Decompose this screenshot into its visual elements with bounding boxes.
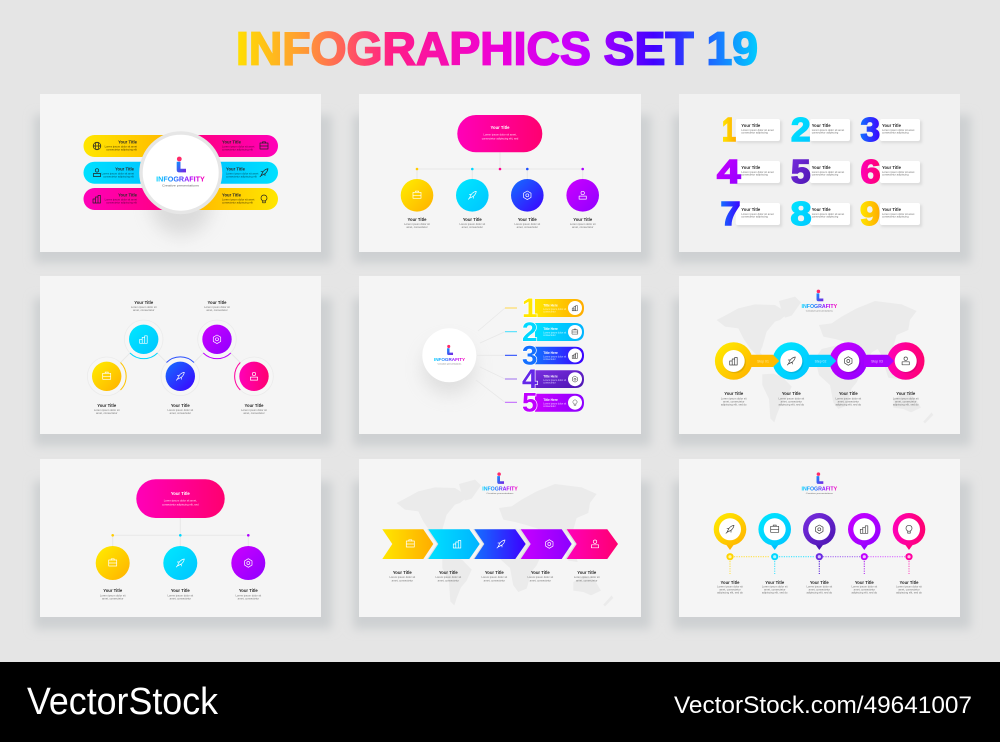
logo: INFOGRAFITY	[482, 487, 518, 493]
card texts: consectetur adipiscing	[741, 172, 768, 176]
bar texts: Lorem ipsum dolor sit	[543, 332, 566, 334]
captions: Lorem ipsum dolor sit	[204, 305, 230, 309]
pill texts left: Your Title	[118, 192, 138, 198]
pill texts right: consectetur adipiscing elit	[222, 200, 253, 204]
number 7: 7	[720, 195, 740, 232]
card texts: Lorem ipsum dolor sit amet	[882, 212, 915, 216]
captions: Your Title	[839, 391, 858, 396]
captions	[404, 217, 596, 229]
bar 2: 2	[522, 317, 538, 347]
card texts: Your Title	[741, 165, 761, 170]
captions: amet, consectetur	[133, 308, 154, 312]
card texts: Lorem ipsum dolor sit amet	[812, 170, 844, 174]
bar texts: Title Here	[543, 351, 558, 355]
top pill text: consectetur adipiscing elit, sed	[162, 502, 199, 506]
card texts: Lorem ipsum dolor sit amet	[882, 170, 915, 174]
pin 2	[758, 513, 791, 560]
captions: Your Title	[245, 403, 264, 408]
bar texts	[543, 304, 566, 408]
captions: adipiscing elit, sed do	[896, 591, 922, 595]
card texts: Lorem ipsum dolor sit amet	[882, 128, 915, 132]
card texts: Your Title	[882, 123, 902, 128]
card texts: consectetur adipiscing	[741, 130, 768, 134]
pill texts right: Lorem ipsum dolor sit amet	[226, 172, 259, 176]
bar texts: consectetur	[543, 358, 556, 361]
bar texts: Title Here	[543, 304, 558, 308]
captions: amet, consectetur	[895, 400, 916, 404]
circle 1	[401, 179, 433, 212]
captions: amet, consectetur	[838, 400, 859, 404]
connector colour ends	[505, 308, 517, 402]
captions: amet, consectetur	[96, 411, 117, 415]
pill texts left: Lorem ipsum dolor sit amet	[102, 172, 134, 176]
captions: Your Title	[171, 403, 190, 408]
number 8: 8	[790, 195, 812, 232]
circle 4	[566, 179, 599, 212]
top pill text: Lorem ipsum dolor sit amet,	[164, 498, 197, 502]
logo	[802, 290, 838, 312]
ring circle yellow	[87, 357, 126, 396]
captions: adipiscing elit, sed do	[893, 402, 919, 406]
card texts: Lorem ipsum dolor sit amet	[741, 170, 774, 174]
bar 4	[522, 364, 584, 394]
captions: Lorem ipsum dolor sit	[778, 396, 804, 400]
step arrows: Step 01	[757, 359, 769, 363]
footer bar	[0, 662, 1000, 742]
card texts: consectetur adipiscing	[882, 130, 909, 134]
bar texts: Lorem ipsum dolor sit	[543, 402, 566, 406]
left pill: magenta	[84, 188, 194, 210]
captions: Lorem ipsum dolor sit	[481, 575, 507, 579]
bar 1: 1	[522, 293, 538, 323]
card texts: Your Title	[741, 207, 761, 212]
top pill text: Lorem ipsum dolor sit amet,	[483, 132, 517, 136]
pill texts right: Your Title	[226, 166, 246, 172]
world map	[397, 480, 613, 606]
card texts: Lorem ipsum dolor sit amet	[741, 212, 774, 216]
captions: Lorem ipsum dolor sit	[100, 593, 126, 597]
logo: INFOGRAFITY	[156, 177, 205, 184]
panel: zigzag five circles	[40, 276, 321, 434]
captions: Your Title	[531, 570, 550, 575]
chevron shadows	[427, 529, 580, 559]
captions: amet, consectetur	[392, 578, 413, 582]
captions: Your Title	[900, 580, 919, 585]
number 2: 2	[791, 111, 810, 148]
captions: Lorem ipsum dolor sit	[435, 575, 461, 579]
number 5: 5	[791, 153, 810, 190]
captions: Lorem ipsum dolor sit	[574, 575, 600, 579]
logo: Creative presentations	[162, 183, 200, 187]
captions: Lorem ipsum dolor sit	[235, 593, 261, 597]
logo: INFOGRAFITY	[802, 304, 838, 310]
captions: Your Title	[97, 403, 117, 408]
captions: Your Title	[855, 580, 874, 585]
world map	[717, 297, 933, 423]
captions: Lorem ipsum dolor sit	[896, 585, 922, 589]
ring circle blue	[161, 357, 200, 396]
logo	[482, 472, 518, 495]
captions: Your Title	[208, 300, 227, 305]
circle 1	[96, 546, 130, 580]
dotted timeline	[730, 557, 909, 574]
bar texts: Title Here	[543, 327, 558, 331]
panel: org chart three circles	[40, 459, 321, 617]
captions: Lorem ipsum dolor sit	[527, 575, 553, 579]
bar texts: consectetur	[543, 382, 556, 384]
captions: amet, consectetur	[576, 578, 597, 582]
captions: amet, consectetur	[102, 596, 123, 600]
ring circle purple	[198, 320, 236, 359]
pill texts right: Your Title	[222, 192, 242, 198]
left pill: yellow	[84, 135, 194, 157]
captions: Lorem ipsum dolor sit	[404, 222, 430, 226]
bar texts: consectetur	[543, 405, 556, 408]
captions: amet, consectetur	[438, 578, 459, 582]
captions	[100, 588, 261, 600]
pill icons	[93, 142, 268, 203]
captions: adipiscing elit, sed do	[721, 402, 747, 406]
captions: Lorem ipsum dolor sit	[806, 585, 832, 589]
captions: amet, consectetur	[854, 588, 875, 592]
captions: Lorem ipsum dolor sit	[570, 222, 596, 226]
circle 2	[456, 179, 489, 212]
number 1: 1	[722, 111, 736, 148]
captions: amet, consectetur	[243, 411, 265, 415]
pill texts left: Your Title	[118, 140, 138, 144]
panel: pin timeline	[679, 459, 960, 617]
footer url: VectorStock.com/49641007	[674, 692, 972, 719]
circle 3	[231, 546, 265, 580]
pill texts right: Lorem ipsum dolor sit amet	[222, 144, 255, 148]
chevron 5	[567, 529, 618, 559]
captions	[717, 580, 922, 595]
captions: amet, consectetur	[781, 400, 802, 404]
chevron 1	[382, 529, 433, 559]
card texts: consectetur adipiscing	[812, 130, 839, 134]
right pill: magenta	[168, 135, 278, 157]
bar texts: Title Here	[543, 374, 558, 378]
footer brand: VectorStock	[27, 681, 219, 723]
pill texts left: Your Title	[115, 166, 135, 172]
captions: amet, consectetur	[406, 225, 428, 229]
top pill text: Your Title	[491, 125, 510, 130]
bar 4: 4	[522, 364, 538, 394]
captions: adipiscing elit, sed do	[806, 591, 833, 595]
pin 5	[893, 513, 925, 560]
pill texts right: consectetur adipiscing elit	[226, 174, 257, 178]
ring circle magenta	[235, 357, 273, 396]
card texts: consectetur adipiscing	[741, 214, 768, 218]
logo: Creative presentations	[806, 309, 833, 312]
pill texts left: Lorem ipsum dolor sit amet	[105, 198, 137, 202]
captions: amet, consectetur	[170, 596, 191, 600]
captions: adipiscing elit, sed do	[717, 591, 743, 595]
captions: adipiscing elit, sed do	[835, 402, 862, 406]
white cards	[736, 119, 920, 225]
top pill text	[162, 491, 199, 506]
pill texts left	[102, 140, 138, 204]
captions: Your Title	[439, 570, 458, 575]
captions: amet, consectetur	[572, 225, 593, 229]
captions: Lorem ipsum dolor sit	[851, 585, 877, 589]
pin 3	[803, 513, 836, 560]
bar texts: Title Here	[543, 398, 558, 402]
captions: Lorem ipsum dolor sit	[893, 396, 919, 400]
number 6: 6	[860, 153, 880, 190]
captions: adipiscing elit, sed do	[762, 591, 788, 595]
bar 5	[522, 388, 584, 418]
captions: Lorem ipsum dolor sit	[459, 222, 485, 226]
captions: Lorem ipsum dolor sit	[241, 408, 267, 412]
captions: Lorem ipsum dolor sit	[94, 408, 120, 412]
pill texts left: consectetur adipiscing elit	[106, 148, 137, 152]
panel: numbered cards one to nine	[679, 94, 960, 252]
card texts: Your Title	[882, 165, 902, 170]
captions: amet, consectetur	[809, 588, 830, 592]
captions: amet, consectetur	[530, 578, 551, 582]
captions: Your Title	[408, 217, 427, 222]
top pill text	[482, 125, 519, 140]
number 4: 4	[717, 153, 741, 190]
captions: amet, consectetur	[517, 225, 538, 229]
donuts	[715, 342, 924, 380]
central circle	[143, 135, 219, 211]
captions: Your Title	[103, 588, 123, 593]
top pill	[136, 479, 225, 518]
right pill: yellow	[168, 188, 278, 210]
pill texts left: Lorem ipsum dolor sit amet	[105, 144, 137, 148]
card texts: Your Title	[812, 207, 831, 212]
captions: adipiscing elit, sed do	[851, 591, 878, 595]
logo	[802, 472, 838, 495]
bar texts: Lorem ipsum dolor sit	[543, 379, 566, 382]
captions: Your Title	[782, 391, 801, 396]
pill texts left: consectetur adipiscing elit	[106, 200, 137, 204]
captions: Lorem ipsum dolor sit	[131, 305, 157, 309]
card texts: Lorem ipsum dolor sit amet	[812, 128, 844, 132]
central circle	[422, 328, 476, 382]
chevron 3	[474, 529, 526, 559]
bar texts: Lorem ipsum dolor sit	[543, 355, 566, 358]
circle 3	[511, 179, 544, 212]
number 3: 3	[860, 111, 880, 148]
bar 1	[522, 293, 584, 323]
captions: Your Title	[171, 588, 190, 593]
captions	[94, 300, 267, 415]
logo: Creative presentations	[806, 492, 833, 495]
captions: amet, consectetur	[170, 411, 191, 415]
captions: Your Title	[577, 570, 597, 575]
panel: world map chevrons	[359, 459, 641, 617]
captions: amet, consectetur	[462, 225, 483, 229]
captions: Lorem ipsum dolor sit	[389, 575, 415, 579]
captions: amet, consectetur	[719, 588, 741, 592]
pin 1	[714, 513, 746, 560]
ring circle cyan	[124, 320, 163, 359]
chevron 2	[428, 529, 480, 559]
pill texts left: consectetur adipiscing elit	[103, 174, 134, 178]
bar texts: consectetur	[543, 334, 556, 337]
captions: Lorem ipsum dolor sit	[514, 222, 540, 226]
captions: amet, consectetur	[238, 596, 259, 600]
captions: Your Title	[239, 588, 258, 593]
captions: Lorem ipsum dolor sit	[835, 396, 861, 400]
bar texts: consectetur	[543, 310, 556, 314]
captions: Your Title	[896, 391, 916, 396]
captions: Lorem ipsum dolor sit	[721, 396, 747, 400]
captions: Lorem ipsum dolor sit	[762, 585, 788, 589]
card texts: consectetur adipiscing	[882, 172, 909, 176]
captions: amet, consectetur	[206, 308, 228, 312]
pill texts right	[222, 140, 259, 204]
captions: Your Title	[721, 580, 740, 585]
step arrows: Step 03	[871, 359, 883, 363]
number 9: 9	[860, 195, 880, 232]
captions: Lorem ipsum dolor sit	[717, 585, 743, 589]
captions	[389, 570, 600, 582]
chevron 4	[521, 529, 572, 559]
pin 4	[848, 513, 881, 560]
top pill text: Your Title	[171, 491, 190, 496]
card texts: Lorem ipsum dolor sit amet	[812, 212, 844, 216]
panel: six pills around central logo	[40, 94, 321, 252]
step arrows: Step 02	[815, 359, 826, 363]
captions: amet, consectetur	[898, 588, 920, 592]
bar 2	[522, 317, 584, 347]
captions: amet, consectetur	[484, 578, 505, 582]
title: INFOGRAPHICS SET 19	[236, 22, 758, 74]
captions: Your Title	[518, 217, 537, 222]
logo: INFOGRAFITY	[802, 487, 838, 493]
logo: Creative presentations	[438, 362, 461, 365]
captions: Your Title	[810, 580, 829, 585]
logo	[156, 157, 205, 187]
captions: Your Title	[463, 217, 482, 222]
logo: INFOGRAFITY	[434, 357, 465, 362]
card texts: Your Title	[812, 123, 831, 128]
bar 3: 3	[522, 340, 538, 370]
connector dots	[111, 534, 250, 537]
card texts: Lorem ipsum dolor sit amet	[741, 128, 774, 132]
captions: Your Title	[134, 300, 154, 305]
white centres with icons	[723, 350, 918, 373]
card texts: consectetur adipiscing	[882, 214, 909, 218]
card texts: Your Title	[882, 207, 902, 212]
pill texts right: consectetur adipiscing elit	[222, 148, 253, 152]
logo: Creative presentations	[486, 492, 514, 495]
bar 5: 5	[522, 388, 538, 418]
panel: org chart four circles	[359, 94, 641, 252]
card texts	[741, 123, 915, 218]
pill texts right: Lorem ipsum dolor sit amet	[222, 198, 255, 202]
circle 2	[163, 546, 197, 580]
bar 3	[522, 340, 584, 370]
central ring	[139, 131, 222, 214]
bar texts: Lorem ipsum dolor sit	[543, 308, 566, 311]
captions: Your Title	[573, 217, 593, 222]
captions: Your Title	[724, 391, 744, 396]
card shadows	[737, 121, 922, 227]
top pill	[457, 115, 542, 152]
panel: logo with five numbered bars	[359, 276, 641, 434]
logo	[434, 345, 465, 365]
pill texts right: Your Title	[222, 140, 242, 144]
card texts: Your Title	[741, 123, 761, 128]
connector dots	[416, 168, 584, 170]
captions: amet, consectetur	[723, 400, 744, 404]
captions: amet, consectetur	[764, 588, 785, 592]
captions: Lorem ipsum dolor sit	[167, 408, 193, 412]
right pill: cyan	[168, 162, 278, 184]
captions	[721, 391, 919, 406]
captions: Your Title	[485, 570, 504, 575]
card texts: Your Title	[812, 165, 831, 170]
captions: adipiscing elit, sed do	[778, 402, 805, 406]
step arrows	[750, 355, 894, 367]
panel: world map four step donuts	[679, 276, 960, 434]
captions: Your Title	[765, 580, 785, 585]
captions: Your Title	[393, 570, 412, 575]
captions: Lorem ipsum dolor sit	[167, 593, 193, 597]
card texts: consectetur adipiscing	[812, 172, 839, 176]
top pill text: consectetur adipiscing elit, sed	[482, 136, 519, 140]
left pill: cyan	[84, 162, 194, 184]
card texts: consectetur adipiscing	[812, 214, 839, 218]
